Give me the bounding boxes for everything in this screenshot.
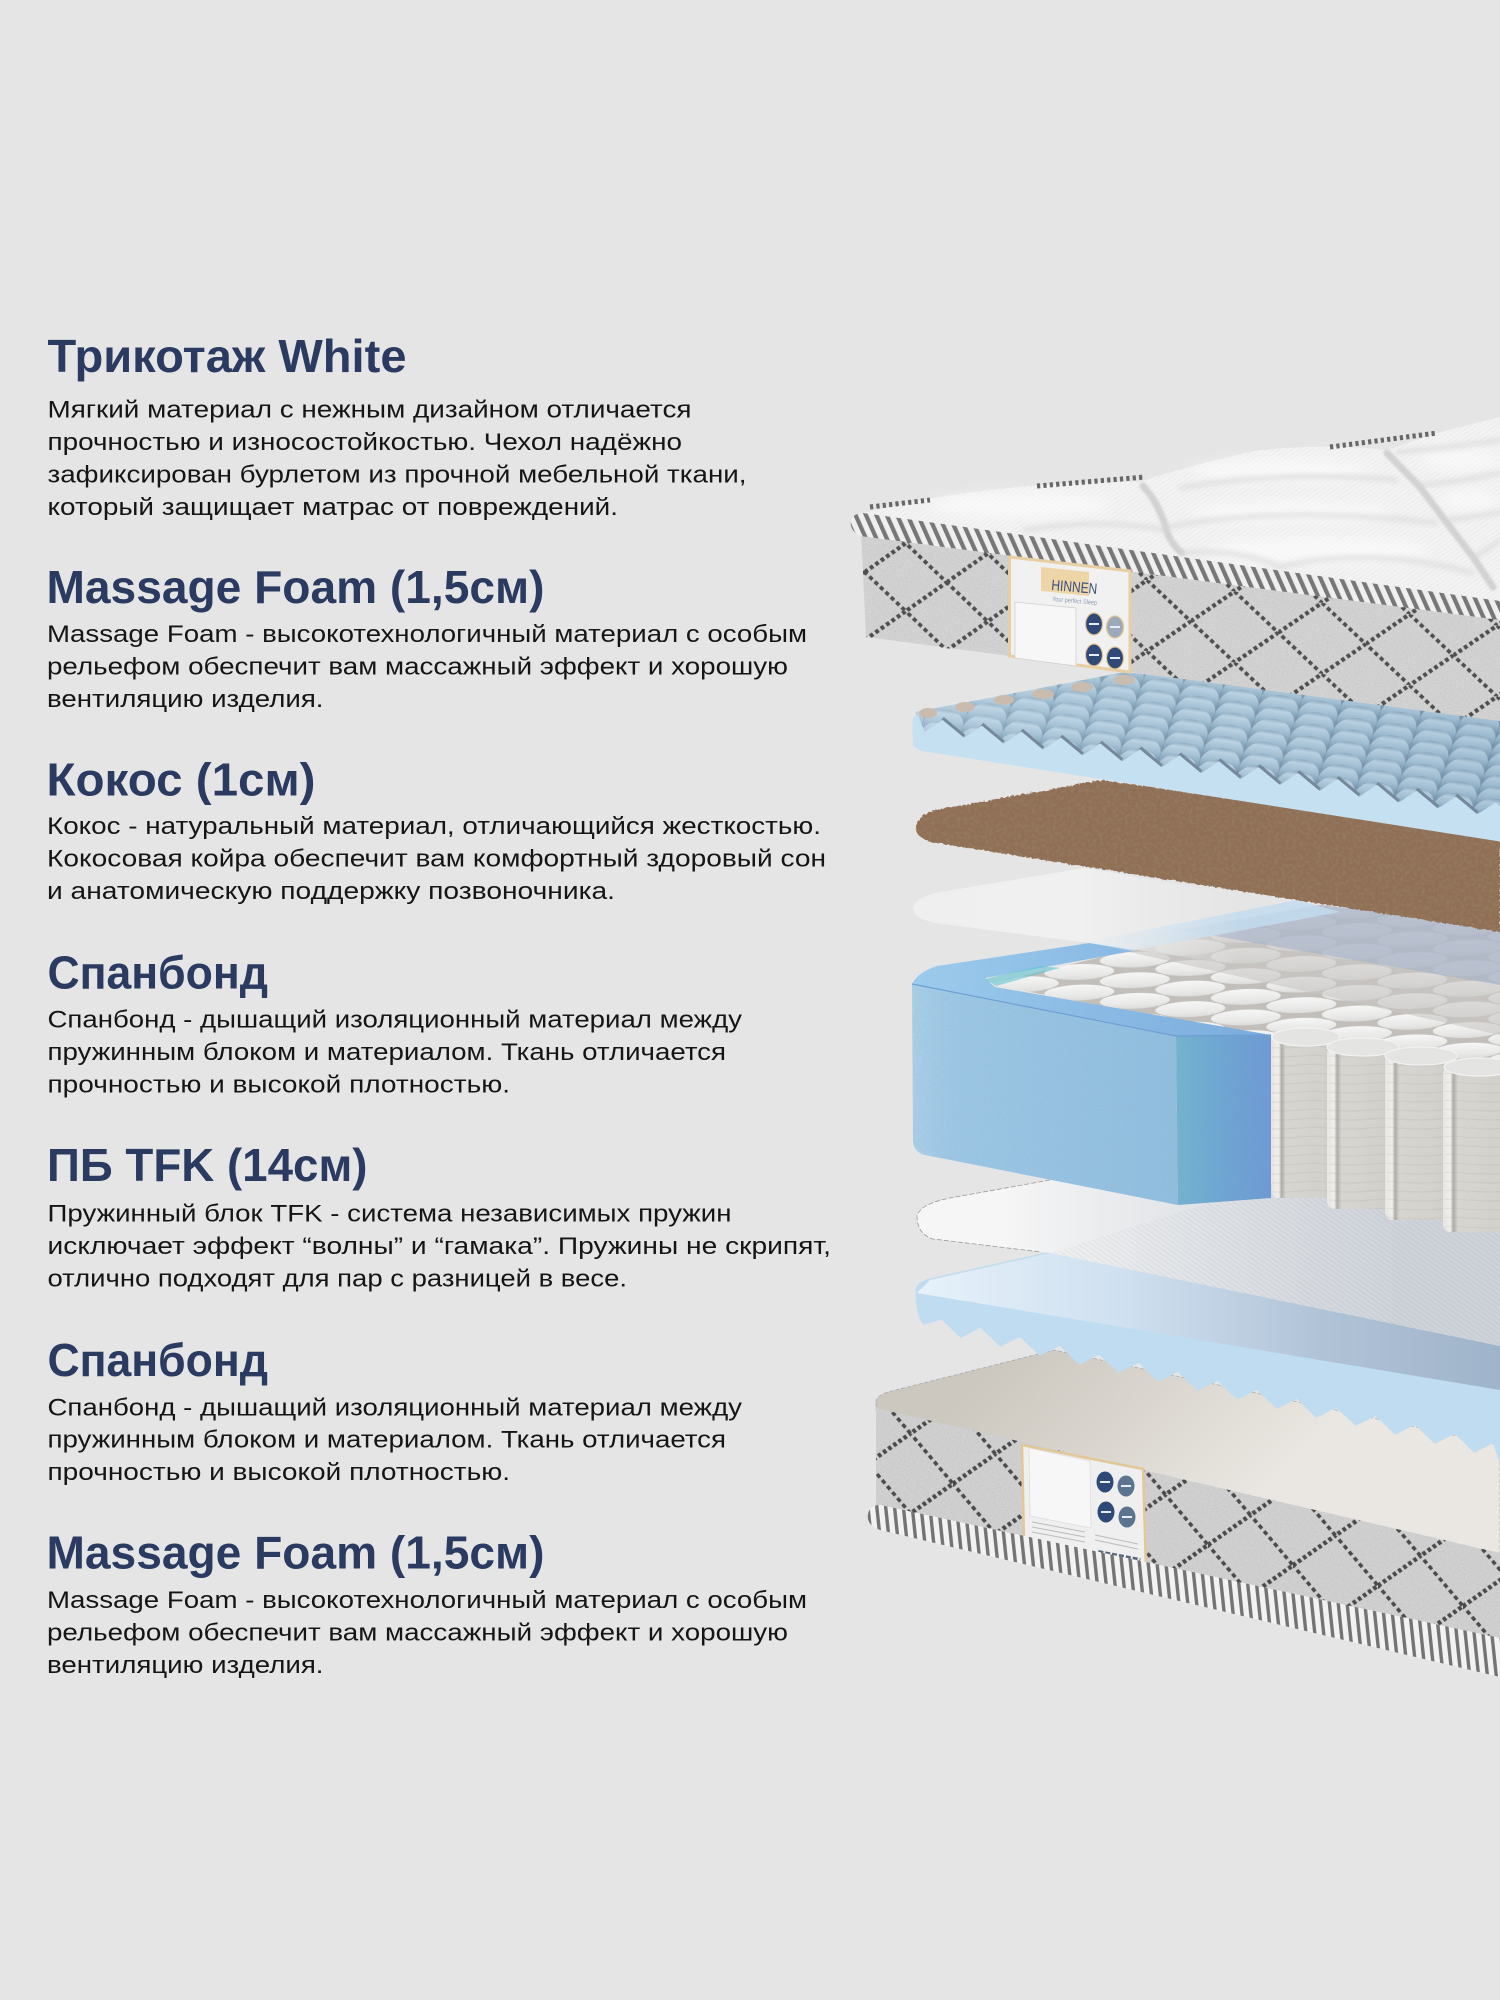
side panel: [861, 530, 1500, 721]
text: massage foam bottom description: вентиляцию изделия.: [47, 1652, 324, 1679]
text: spring block description: исключает эффект “волны” и “гамака”. Пружины не скрипят,: [48, 1233, 831, 1260]
heading: spunbond bottom: Спанбонд: [48, 1334, 268, 1386]
top label: Your perfect Sleep: [1052, 596, 1098, 607]
back piping: [870, 433, 1437, 507]
text: spunbond bottom description: [48, 1394, 743, 1486]
heading: massage foam bottom: Massage Foam (1,5см): [46, 1527, 544, 1579]
text: coconut description: [47, 813, 826, 905]
foam frame back edge: [1080, 900, 1340, 951]
layer: bottom mattress tray: [868, 1350, 1500, 1677]
layer: spring block with foam frame: [912, 900, 1500, 1232]
heading: coconut: Кокос (1см): [46, 754, 316, 806]
text: knit cover description: прочностью и износостойкостью. Чехол надёжно: [48, 429, 682, 456]
foam front face: [913, 716, 1500, 841]
text: knit cover description: [48, 396, 746, 521]
text: spunbond top description: пружинным блоком и материалом. Ткань отличается: [48, 1039, 726, 1066]
text: spunbond bottom description: прочностью и высокой плотностью.: [48, 1459, 510, 1486]
top label: [1010, 557, 1130, 672]
text: coconut description: Кокосовая койра обеспечит вам комфортный здоровый сон: [47, 846, 826, 872]
text: coconut description: Кокос - натуральный материал, отличающийся жесткостью.: [47, 813, 821, 840]
layer: lower massage foam: [917, 1253, 1500, 1460]
back-row haze over springs: [1180, 905, 1500, 985]
text: spring block description: [48, 1201, 831, 1292]
front springs: [1272, 1028, 1500, 1232]
text: massage foam top description: Massage Foam - высокотехнологичный материал с особым: [47, 621, 807, 648]
layer: top mattress: [851, 417, 1500, 721]
layer: upper spunbond sheet: [913, 868, 1240, 965]
text: massage foam top description: [47, 621, 807, 713]
text: knit cover description: Мягкий материал с нежным дизайном отличается: [48, 396, 692, 424]
heading: massage foam top: Massage Foam (1,5см): [46, 561, 544, 613]
text: spunbond bottom description: Спанбонд - дышащий изоляционный материал между: [48, 1394, 743, 1422]
text: spunbond top description: [48, 1007, 743, 1098]
illustration: exploded mattress layers: [851, 417, 1500, 1677]
text: massage foam bottom description: Massage Foam - высокотехнологичный материал с особым: [47, 1587, 807, 1614]
text: massage foam bottom description: [47, 1587, 807, 1679]
zigzag inner shadow: [942, 718, 1478, 813]
layer: lower spunbond sheet: [917, 1180, 1500, 1346]
text: spunbond top description: прочностью и высокой плотностью.: [48, 1071, 510, 1098]
layer: upper massage foam: [913, 672, 1500, 841]
text: spunbond top description: Спанбонд - дышащий изоляционный материал между: [48, 1007, 743, 1034]
spring tops: [990, 905, 1500, 1090]
foam tips: [919, 675, 1135, 718]
layer: coconut coir: [916, 780, 1500, 932]
quilted surface: [858, 417, 1500, 618]
text: massage foam top description: вентиляцию изделия.: [47, 686, 324, 713]
text: massage foam bottom description: рельефом обеспечит вам массажный эффект и хорошую: [47, 1619, 788, 1646]
text: spring block description: отлично подходят для пар с разницей в весе.: [48, 1266, 627, 1292]
foam frame: [912, 943, 1271, 1205]
mid-row haze over springs: [1089, 905, 1500, 1035]
text: spunbond bottom description: пружинным блоком и материалом. Ткань отличается: [48, 1427, 726, 1454]
heading: spunbond top: Спанбонд: [48, 946, 268, 998]
text: spring block description: Пружинный блок TFK - система независимых пружин: [48, 1201, 732, 1228]
section: text descriptions of mattress layers: [46, 330, 831, 1679]
text: knit cover description: зафиксирован бурлетом из прочной мебельной ткани,: [48, 462, 746, 488]
text: knit cover description: который защищает матрас от повреждений.: [48, 494, 618, 521]
top label: HINNEN: [1051, 577, 1098, 598]
bottom label: [1022, 1445, 1146, 1570]
heading: knit cover: Трикотаж White: [48, 330, 406, 382]
text: massage foam top description: рельефом обеспечит вам массажный эффект и хорошую: [47, 654, 788, 680]
heading: spring block: ПБ TFK (14см): [47, 1139, 368, 1191]
front piping: [851, 513, 1500, 620]
text: coconut description: и анатомическую поддержку позвоночника.: [47, 878, 615, 905]
